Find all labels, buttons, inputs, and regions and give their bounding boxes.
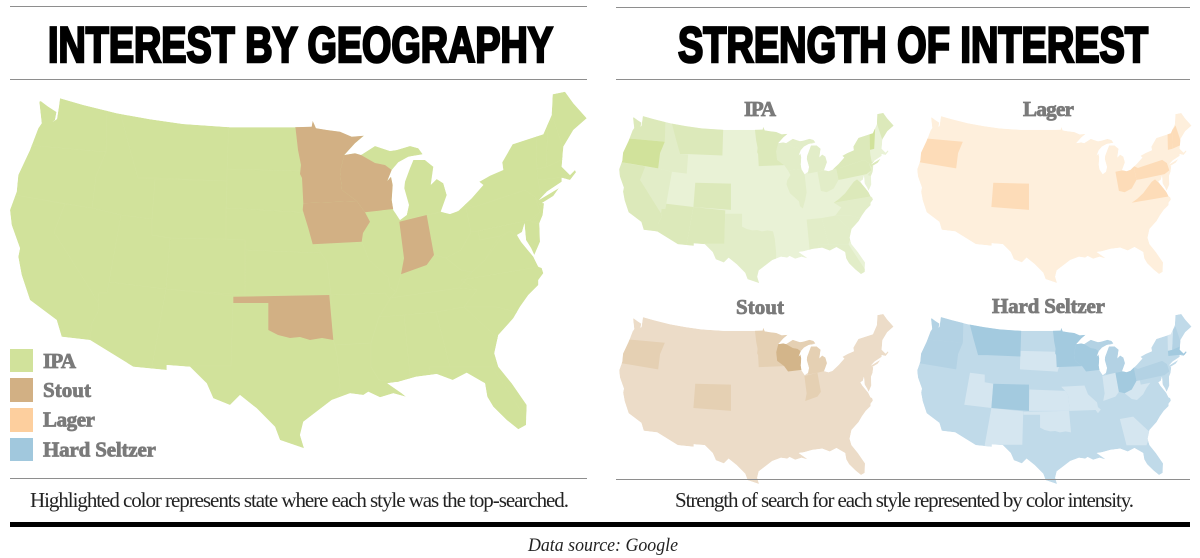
- legend item: Lager: Lager: [43, 408, 95, 432]
- data source: Data source: Google: [527, 535, 678, 556]
- map: top-searched style by state: [0, 85, 595, 455]
- small map title: Lager: Lager: [1023, 97, 1074, 121]
- legend item: Hard Seltzer: Hard Seltzer: [43, 438, 156, 462]
- rule: top left: [10, 6, 587, 7]
- rule: below right heading: [616, 79, 1190, 80]
- legend item: IPA: IPA: [43, 349, 77, 373]
- legend item: Lager: [10, 408, 95, 432]
- rule: top right: [616, 7, 1190, 8]
- legend item: Stout: [10, 378, 91, 402]
- rule: above right caption: [616, 479, 1190, 480]
- thick footer rule: [10, 522, 1190, 527]
- small map: IPA intensity: [614, 110, 898, 286]
- legend item: IPA: [10, 349, 77, 373]
- small map title: Stout: Stout: [736, 295, 784, 319]
- legend item: Stout: Stout: [43, 378, 91, 402]
- caption: left: Highlighted color represents state where each style was the top-searched.: [30, 488, 569, 512]
- heading: interest by geography: INTEREST BY GEOGRAPHY: [48, 17, 553, 73]
- small map: Stout intensity: [614, 314, 894, 484]
- caption: right: Strength of search for each style represented by color intensity.: [675, 488, 1134, 512]
- small map title: Hard Seltzer: Hard Seltzer: [992, 294, 1105, 318]
- small map: Lager intensity: [912, 113, 1192, 283]
- small map title: IPA: IPA: [744, 97, 777, 121]
- rule: above left caption: [10, 478, 587, 479]
- rule: below left heading: [10, 79, 587, 80]
- small map: Hard Seltzer intensity: [912, 313, 1193, 484]
- legend: [10, 349, 156, 462]
